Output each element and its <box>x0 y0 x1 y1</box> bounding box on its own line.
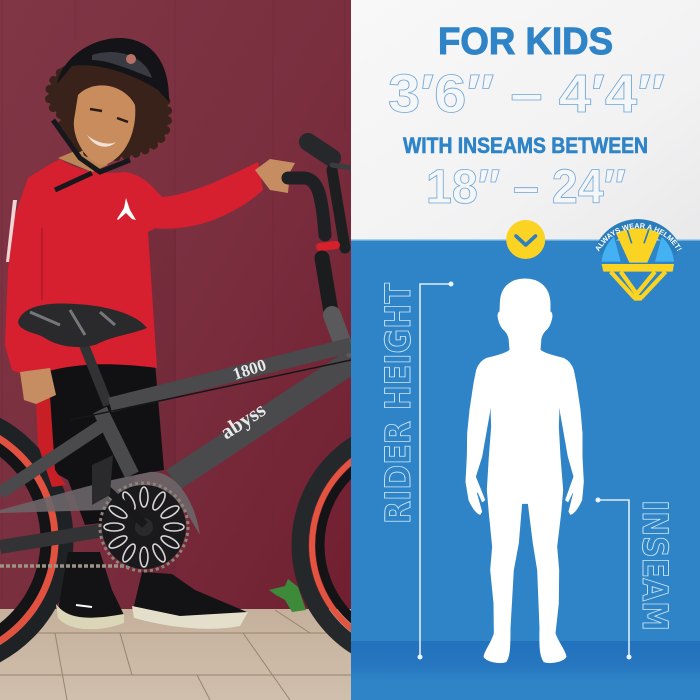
crank arm <box>108 490 145 525</box>
boy hand on handlebar <box>255 159 295 193</box>
rear wheel <box>0 409 66 671</box>
bike frame <box>0 345 351 547</box>
plant <box>269 579 306 612</box>
boy hand at side <box>20 368 56 404</box>
inseam range: 18″ – 24″ <box>426 161 626 214</box>
bike seat <box>18 303 147 347</box>
paved ground <box>0 609 351 700</box>
rider height marker <box>418 282 454 660</box>
bike seat post <box>84 345 108 405</box>
panel: sizing info <box>351 0 700 240</box>
pants <box>48 362 164 525</box>
helmet chin strap <box>53 120 130 190</box>
pedal <box>92 455 113 505</box>
front wheel <box>292 436 351 654</box>
bike helmet <box>57 38 169 102</box>
shirt logo <box>117 198 136 220</box>
frame brand text: 1800 <box>230 355 269 384</box>
boy shirt <box>5 159 263 377</box>
eyes <box>90 109 128 122</box>
rider height label: RIDER HEIGHT <box>379 283 419 524</box>
icon: helmet badge <box>596 219 682 301</box>
floor band <box>351 641 700 681</box>
handlebar <box>288 142 351 350</box>
helmet badge text: ALWAYS WEAR A HELMET! <box>596 223 682 252</box>
chainring <box>100 483 188 571</box>
smile <box>87 135 116 147</box>
panel: body diagram <box>351 239 700 700</box>
curly hair <box>48 63 169 158</box>
right shoe <box>132 572 248 629</box>
inseam label: INSEAM <box>634 500 674 631</box>
chain guard <box>0 472 200 535</box>
rider height range: 3′6″ – 4′4″ <box>388 64 665 124</box>
inseam marker <box>596 498 632 660</box>
subtitle: WITH INSEAMS BETWEEN <box>403 133 648 158</box>
icon: chevron badge <box>506 220 545 259</box>
arm crease <box>41 228 43 300</box>
boy face <box>74 85 135 165</box>
chain <box>0 564 150 568</box>
wall <box>0 0 351 612</box>
frame brand text abyss: abyss <box>216 397 270 444</box>
title: FOR KIDS <box>438 21 613 63</box>
child silhouette <box>466 279 583 663</box>
left shoe <box>56 552 124 629</box>
photo: boy with BMX bike <box>0 0 351 700</box>
pants red stripe <box>36 396 66 487</box>
sleeve print <box>6 200 17 262</box>
boy neck <box>58 150 108 172</box>
